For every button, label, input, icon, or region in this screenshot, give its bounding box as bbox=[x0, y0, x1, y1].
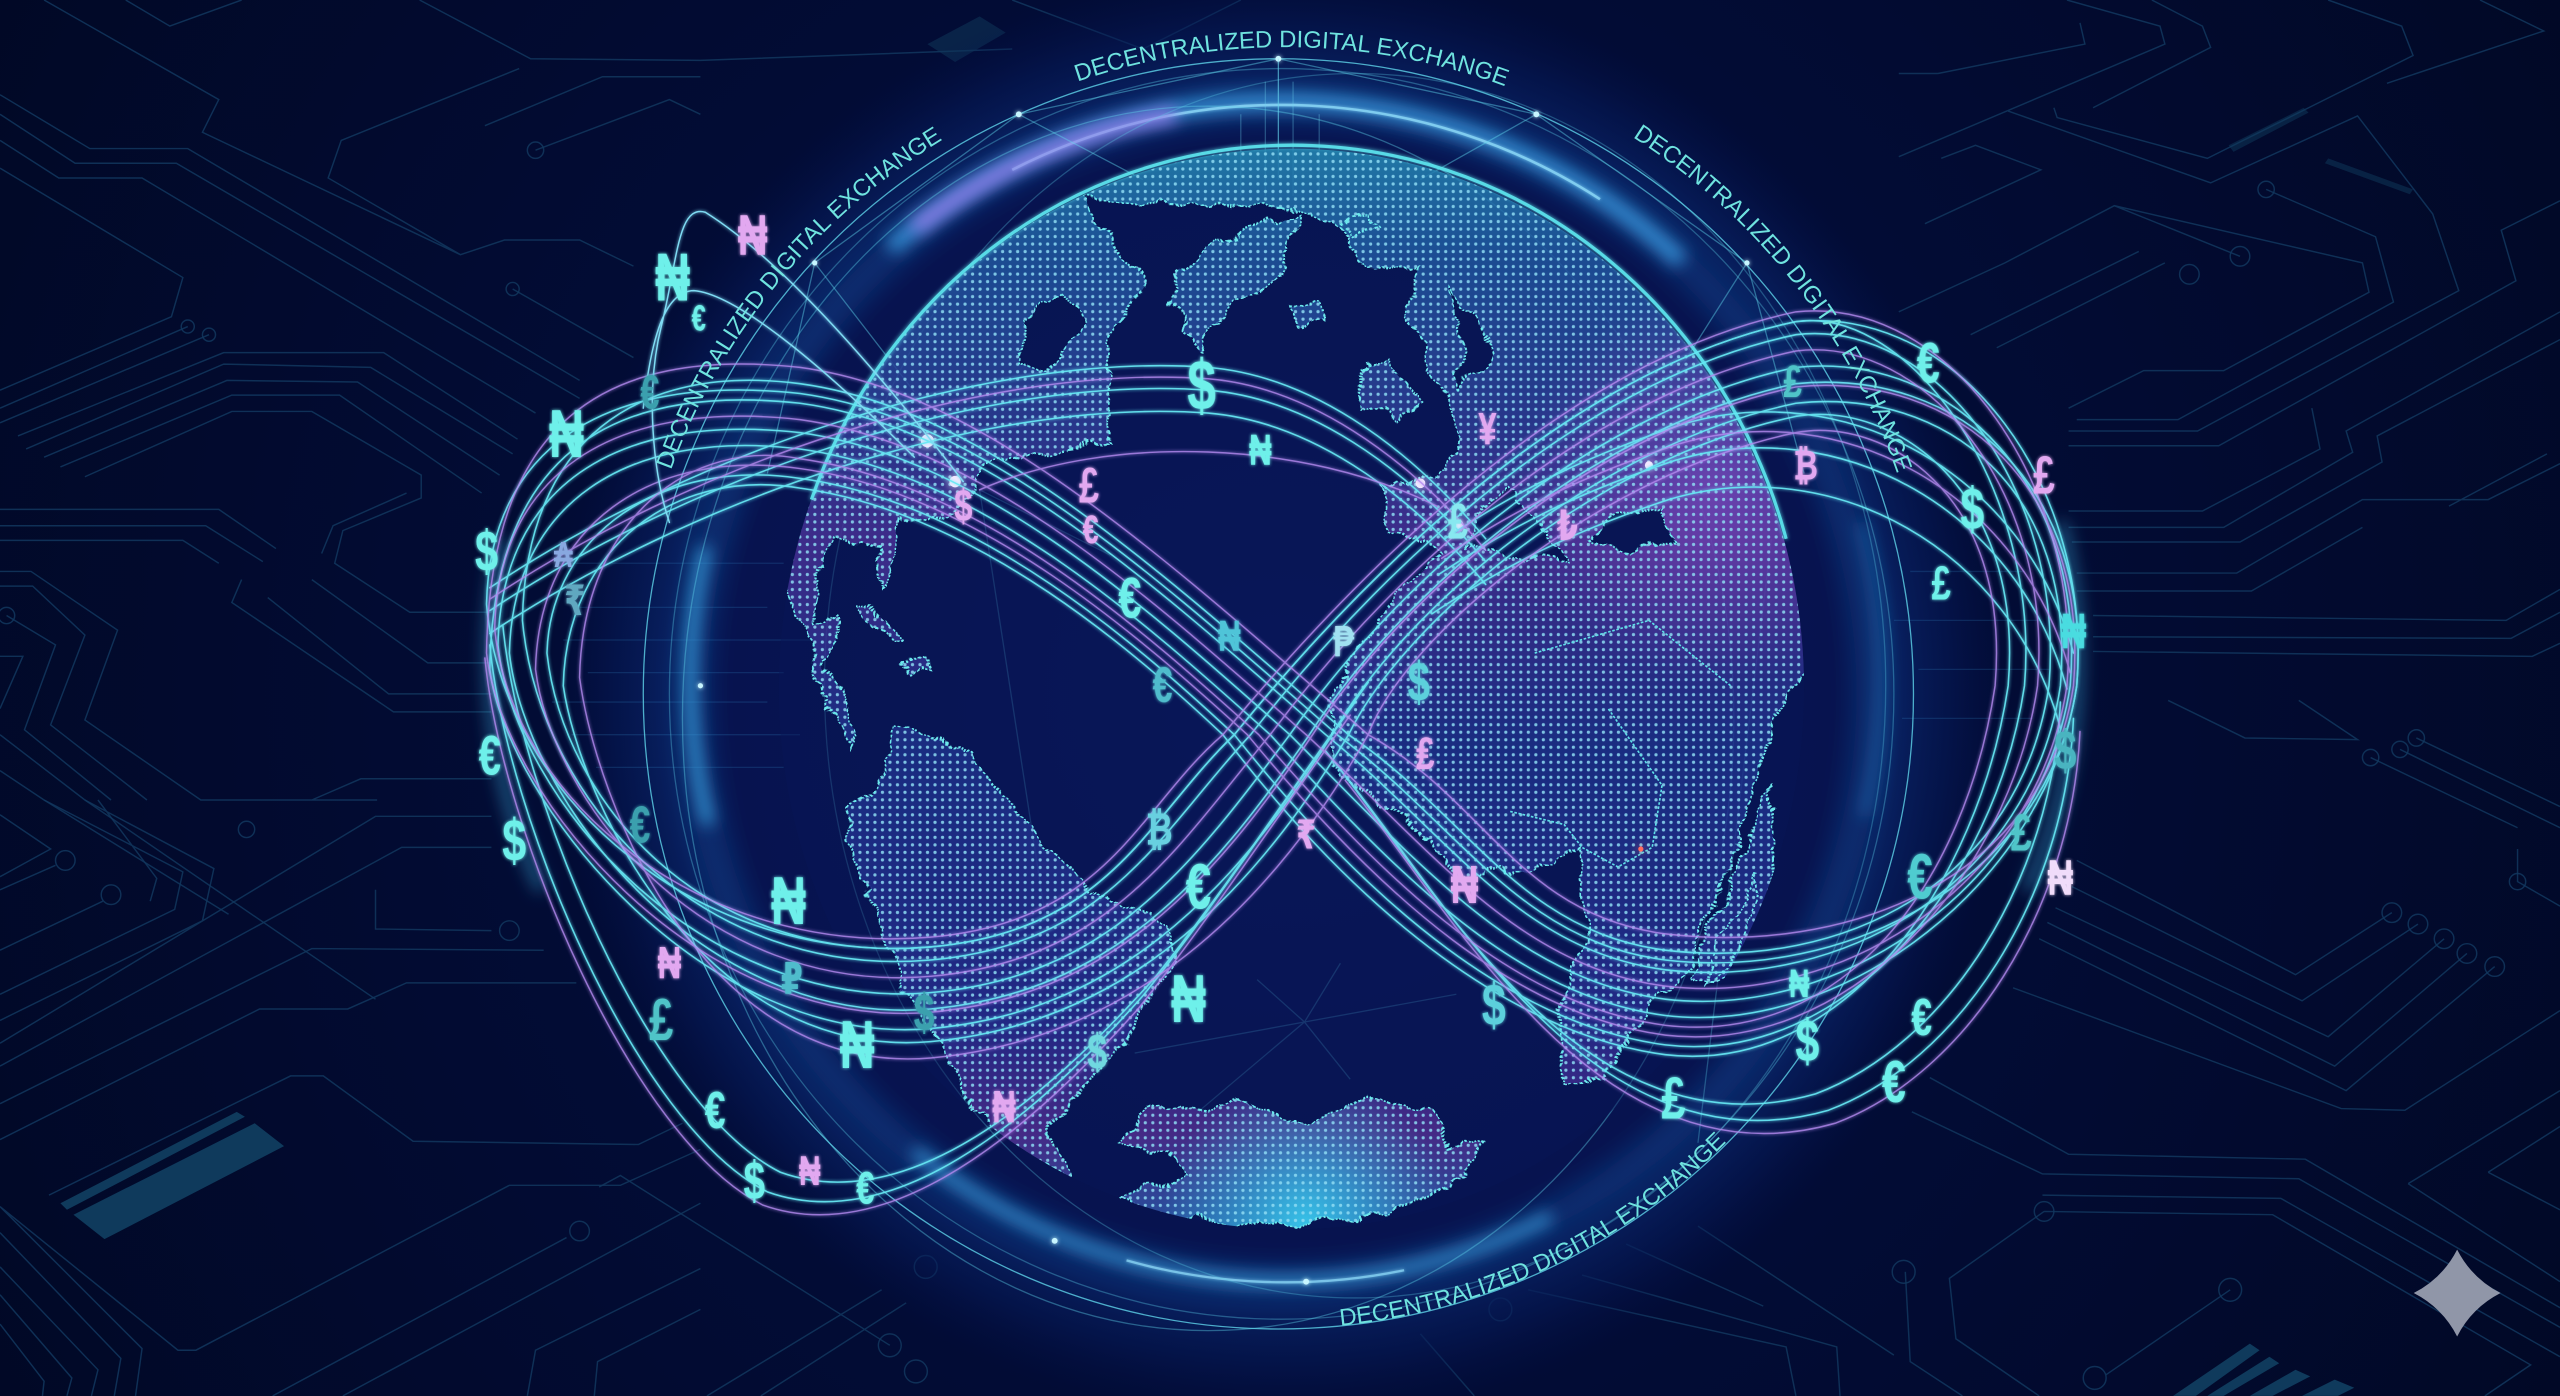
infinity ribbon of transaction strands bbox=[485, 211, 2080, 1215]
cyan currency glyphs: $ bbox=[914, 983, 934, 1041]
cyan currency glyphs: ₱ bbox=[1333, 617, 1355, 666]
cyan currency glyphs: ₦ bbox=[1218, 612, 1241, 661]
cyan currency glyphs: £ bbox=[1661, 1066, 1685, 1132]
cyan currency glyphs: $ bbox=[1187, 345, 1216, 425]
cyan currency glyphs: £ bbox=[1783, 357, 1802, 407]
pink currency glyphs: ₦ bbox=[738, 202, 768, 268]
ribbon edge glow bbox=[490, 522, 2077, 890]
cyan currency glyphs: ₦ bbox=[840, 1007, 875, 1083]
pink currency glyphs: € bbox=[1083, 509, 1099, 552]
continent coastlines bbox=[767, 131, 1829, 1228]
pink currency glyphs: ₿ bbox=[1793, 442, 1818, 489]
pink currency glyphs: ₦ bbox=[2047, 851, 2073, 906]
upper left loop strand bbox=[643, 211, 963, 522]
cyan currency glyphs: € bbox=[1882, 1049, 1906, 1116]
pink currency glyphs: $ bbox=[1087, 1026, 1107, 1081]
cyan currency glyphs: £ bbox=[649, 987, 673, 1054]
pink currency glyphs: ₹ bbox=[1296, 814, 1316, 858]
cyan currency glyphs: ₦ bbox=[1171, 961, 1206, 1037]
globe limb highlight bbox=[811, 145, 1786, 539]
pink currency glyphs: ₦ bbox=[657, 938, 681, 988]
pink currency glyphs: ¥ bbox=[1478, 404, 1497, 455]
cyan currency glyphs: $ bbox=[743, 1151, 765, 1210]
purple strands bbox=[485, 311, 2080, 1215]
cyan currency glyphs: ₽ bbox=[781, 955, 803, 1004]
pink currency glyphs: $ bbox=[954, 481, 972, 531]
label: right arc: DECENTRALIZED DIGITAL EXCHANGE bbox=[1634, 124, 1912, 473]
cyan currency glyphs: € bbox=[1911, 988, 1932, 1046]
pink currency glyphs: ₺ bbox=[1557, 502, 1578, 549]
ring network nodes bbox=[698, 56, 1750, 1285]
label: left arc: DECENTRALIZED DIGITAL EXCHANGE bbox=[656, 126, 942, 468]
pink currency glyphs: ₦ bbox=[992, 1082, 1016, 1132]
cyan currency glyphs: ₦ bbox=[549, 396, 584, 472]
cyan currency glyphs: $ bbox=[502, 808, 526, 874]
cyan currency glyphs: € bbox=[692, 298, 706, 338]
cyan currency glyphs: $ bbox=[475, 518, 498, 583]
label: bottom arc: DECENTRALIZED DIGITAL EXCHANGE bbox=[1340, 1132, 1726, 1326]
cyan currency glyphs: € bbox=[705, 1081, 725, 1139]
city light flares bbox=[921, 434, 1653, 852]
pink currency glyphs: ₿ bbox=[1146, 804, 1173, 855]
cyan currency glyphs: ₦ bbox=[655, 240, 690, 315]
cyan currency glyphs: € bbox=[1118, 565, 1141, 630]
cyan currency glyphs: ₦ bbox=[2060, 604, 2086, 659]
cyan currency glyphs: $ bbox=[1795, 1008, 1819, 1075]
cyan currency glyphs: ₹ bbox=[564, 577, 585, 624]
cyan currency glyphs: ₦ bbox=[771, 863, 806, 939]
cyan currency glyphs: ₦ bbox=[1789, 963, 1810, 1006]
cyan currency glyphs: € bbox=[856, 1163, 874, 1214]
cyan currency glyphs: € bbox=[1917, 330, 1940, 395]
cyan currency glyphs bbox=[475, 240, 2086, 1214]
outer rings and network lines bbox=[643, 59, 1913, 1331]
africa inner coastline bbox=[1510, 620, 1731, 867]
label: top arc: DECENTRALIZED DIGITAL EXCHANGE bbox=[1074, 30, 1510, 86]
arc label text bbox=[656, 30, 1912, 1326]
outer halo disc bbox=[514, 0, 2049, 1396]
cyan currency glyphs: € bbox=[1152, 658, 1172, 713]
faint horizontal light streaks bbox=[552, 563, 2049, 767]
globe ocean bbox=[779, 149, 1734, 1118]
pink currency glyphs: ₦ bbox=[799, 1147, 821, 1194]
cyan currency glyphs: € bbox=[1907, 841, 1933, 912]
pink currency glyphs: £ bbox=[1079, 459, 1099, 514]
cyan currency glyphs: € bbox=[640, 365, 659, 419]
pink currency glyphs: £ bbox=[2033, 445, 2055, 505]
pink currency glyphs bbox=[657, 202, 2073, 1194]
currency symbols bbox=[475, 202, 2086, 1214]
top light rays bbox=[1241, 59, 1319, 196]
cyan currency glyphs: £ bbox=[1932, 556, 1951, 610]
watermark sparkle icon bbox=[2414, 1250, 2501, 1336]
cyan currency glyphs: $ bbox=[1482, 972, 1506, 1039]
continent fills bbox=[767, 131, 1829, 1257]
cyan currency glyphs: $ bbox=[1960, 476, 1984, 543]
pink currency glyphs: ₦ bbox=[1450, 855, 1479, 915]
pink currency glyphs: ₤ bbox=[1416, 729, 1434, 780]
cyan strands bbox=[487, 321, 2078, 1202]
cyan currency glyphs: £ bbox=[2011, 803, 2032, 862]
glowing inner ring bbox=[690, 101, 1882, 1282]
cyan currency glyphs: $ bbox=[2054, 720, 2076, 782]
cyan currency glyphs: € bbox=[479, 725, 501, 787]
cyan currency glyphs: € bbox=[1186, 851, 1211, 922]
cyan currency glyphs: ₦ bbox=[1249, 426, 1272, 475]
globe bbox=[767, 131, 1829, 1257]
cyan currency glyphs: £ bbox=[1448, 495, 1468, 550]
cyan currency glyphs: € bbox=[630, 795, 650, 854]
cyan currency glyphs: $ bbox=[1408, 651, 1430, 713]
cyan currency glyphs: ₳ bbox=[554, 535, 573, 575]
